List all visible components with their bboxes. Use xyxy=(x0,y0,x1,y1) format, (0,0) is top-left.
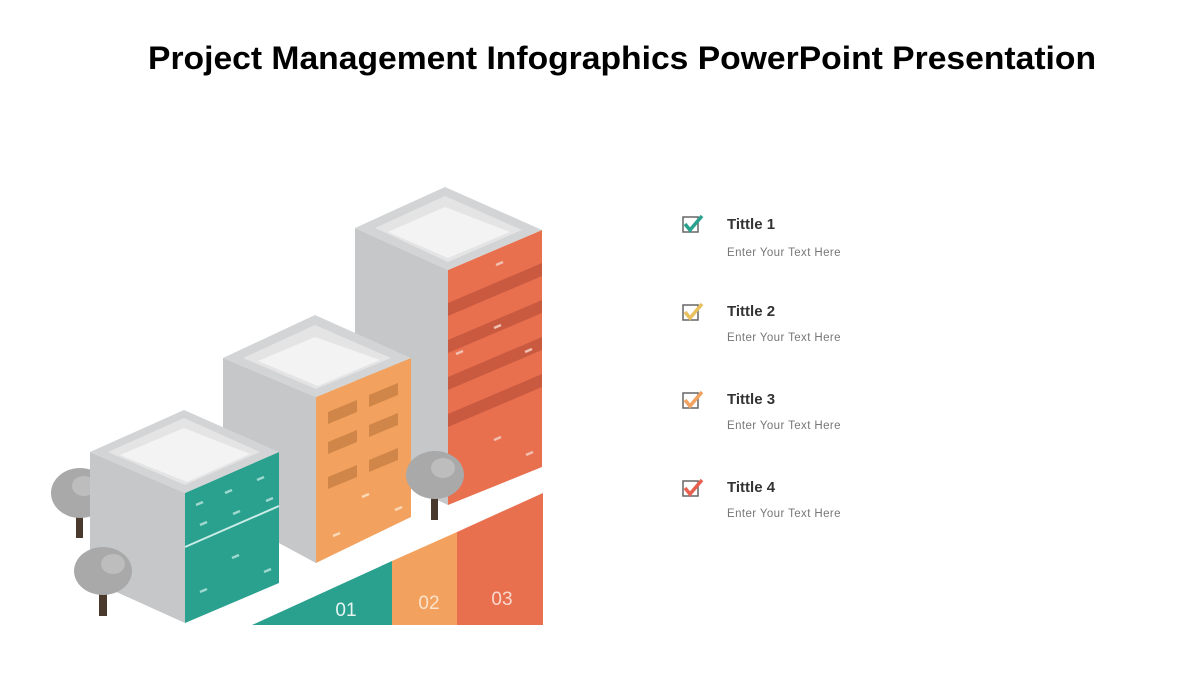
building 3 (tall, red) xyxy=(355,187,542,505)
base bar with numbers: 02 xyxy=(418,593,440,614)
list item 2: Tittle 2 xyxy=(727,303,775,320)
list item 3: Enter Your Text Here xyxy=(727,420,841,432)
base bar with numbers: 01 xyxy=(335,600,357,621)
list item 2 xyxy=(683,303,841,344)
building 2 (orange) xyxy=(223,315,411,563)
list item 4 xyxy=(683,479,841,520)
building 1 (teal) xyxy=(90,410,279,623)
title: Project Management Infographics PowerPoint Presentation xyxy=(148,40,1096,76)
list item 4: Tittle 4 xyxy=(727,479,776,496)
base bar with numbers: 03 xyxy=(491,589,513,610)
list item 1: Enter Your Text Here xyxy=(727,247,841,259)
list item 1 xyxy=(683,216,841,259)
list item 3: Tittle 3 xyxy=(727,391,775,408)
tree 3 xyxy=(406,451,464,520)
list item 4: Enter Your Text Here xyxy=(727,508,841,520)
base bar with numbers xyxy=(252,493,543,625)
list item 2: Enter Your Text Here xyxy=(727,332,841,344)
tree 2 xyxy=(74,547,132,616)
list item 1: Tittle 1 xyxy=(727,216,775,233)
tree 1 xyxy=(51,468,109,538)
list item 3 xyxy=(683,391,841,432)
